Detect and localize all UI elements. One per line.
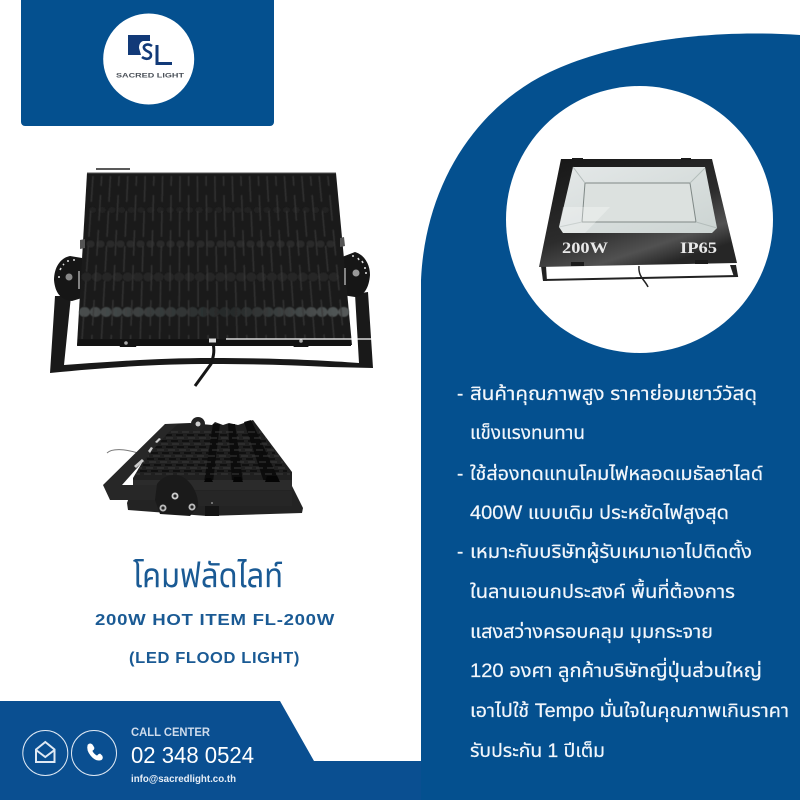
right pivot disc	[342, 252, 370, 297]
text block: product features: เหมาะกับบริษัทผู้รับเหมาเอาไปติดตั้ง	[470, 539, 752, 564]
power cable	[195, 343, 214, 386]
fin channels	[204, 420, 280, 482]
subheading: model: 200W HOT ITEM FL-200W	[95, 612, 335, 629]
panel: logo header	[21, 0, 274, 126]
email address: info@sacredlight.co.th	[131, 774, 236, 785]
icon: envelope in circle	[23, 730, 68, 776]
circle: white product badge	[506, 86, 773, 353]
heatsink body	[77, 173, 352, 345]
logo badge	[103, 14, 194, 104]
bracket	[543, 265, 737, 280]
cable	[639, 266, 648, 287]
mounting bracket	[50, 292, 373, 373]
panel: footer contact band	[0, 701, 421, 800]
text block: product features: แข็งแรงทนทาน	[470, 423, 585, 444]
contact label: CALL CENTER	[131, 725, 210, 739]
left pivot disc	[54, 256, 82, 301]
text block: product features	[457, 382, 789, 762]
text block: product features: แสงสว่างครอบคลุม มุมกระจาย	[470, 620, 713, 643]
housing	[539, 159, 737, 267]
text block: product features: 120 องศา ลูกค้าบริษัทญี่ปุ่นส่วนใหญ่	[470, 657, 762, 683]
base edge and lugs	[77, 339, 351, 347]
U bracket	[103, 424, 178, 500]
heatsink fins	[82, 176, 344, 340]
cross fins	[133, 432, 290, 474]
top knob	[191, 417, 205, 431]
white reflection line	[226, 338, 373, 340]
ridged heatsink	[133, 420, 292, 490]
glass	[559, 167, 717, 233]
text block: product features: สินค้าคุณภาพสูง ราคาย่อมเยาว์วัสดุ	[470, 382, 757, 406]
front face	[133, 480, 292, 490]
cable	[107, 450, 138, 453]
phone number: 02 348 0524	[131, 742, 254, 768]
heading: product name: โคมฟลัดไลท์	[133, 557, 283, 595]
icon: phone in circle	[72, 730, 116, 776]
label: IP rating: IP65	[680, 240, 717, 257]
text block: product features: 400W แบบเดิม ประหยัดไฟสูงสุด	[470, 503, 729, 525]
image: flood light front view	[539, 158, 738, 287]
subheading: product type: (LED FLOOD LIGHT)	[129, 650, 300, 667]
image: small flood light angled view	[103, 417, 303, 516]
text block: product features: -	[457, 384, 463, 405]
label: wattage: 200W	[562, 240, 608, 257]
text block: product features: เอาไปใช้ Tempo มั่นใจในคุณภาพเกินราคา	[470, 698, 789, 722]
logo badge: SACRED LIGHT	[116, 72, 185, 80]
text block: product features: -	[457, 464, 463, 485]
panel: right blue curved background	[421, 33, 800, 800]
text block: product features: รับประกัน 1 ปีเต็ม	[470, 741, 605, 762]
text block: product features: ใช้ส่องทดแทนโคมไฟหลอดเมธัลฮาไลด์	[470, 462, 763, 485]
rotating joint	[155, 475, 198, 516]
mount plate	[127, 486, 303, 516]
text block: product features: -	[457, 542, 463, 563]
image: large flood light back view	[50, 169, 373, 386]
text block: product features: ในลานเอนกประสงค์ พื้นที่ต้องการ	[470, 578, 735, 603]
fin highlight bands	[84, 210, 350, 312]
